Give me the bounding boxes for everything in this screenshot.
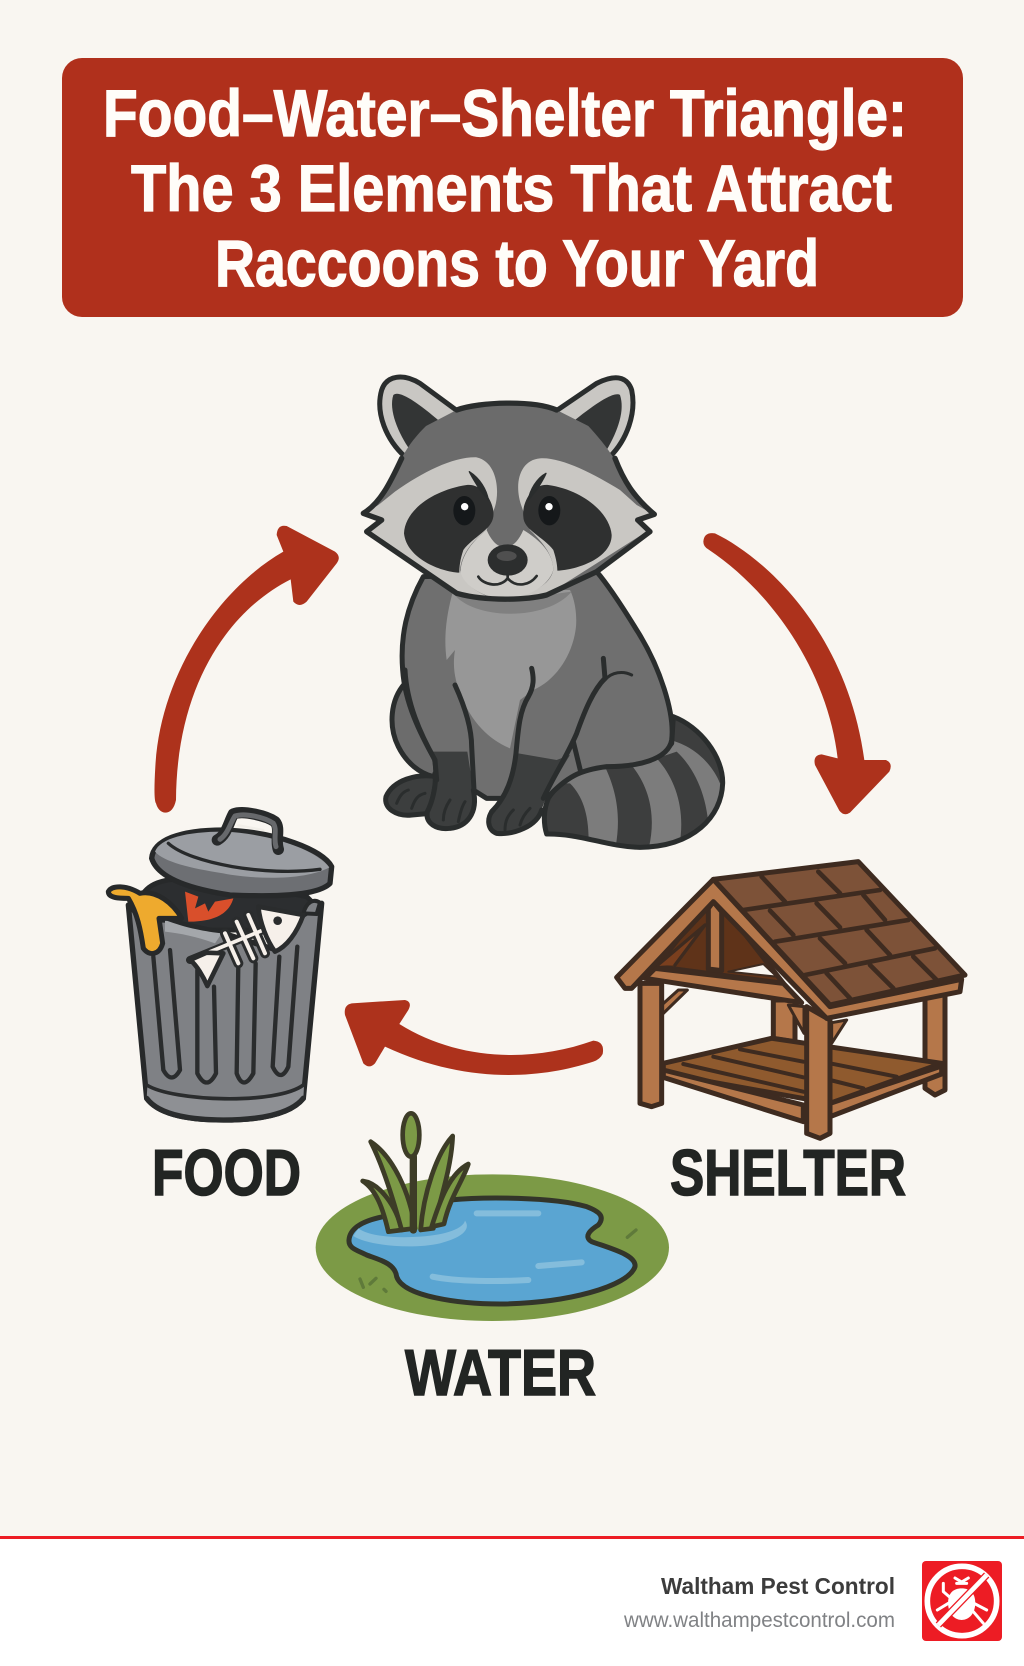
raccoon: back haunch	[392, 683, 440, 777]
trash: can body	[128, 903, 322, 1120]
shelter: rafters	[617, 879, 962, 1018]
footer: company name: Waltham Pest Control	[661, 1573, 895, 1599]
raccoon: head	[363, 403, 654, 599]
trash: contents	[143, 879, 317, 930]
shelter: rear posts	[773, 1000, 795, 1042]
shelter: braces	[662, 990, 687, 1015]
raccoon: eyes	[453, 496, 560, 525]
trash: fish skeleton	[190, 907, 303, 986]
shelter: cross beam	[645, 968, 802, 1003]
arrow: food to raccoon	[154, 526, 339, 813]
raccoon: right foreleg	[489, 753, 570, 834]
shelter: gable	[657, 893, 783, 983]
raccoon: leg lines	[397, 658, 632, 830]
icon: wooden shelter	[617, 862, 965, 1138]
raccoon: body	[402, 572, 672, 798]
footer	[0, 1536, 1024, 1666]
shelter: floor	[663, 1038, 942, 1103]
arrow: raccoon to shelter	[703, 533, 891, 814]
icon: raccoon	[363, 377, 730, 850]
shelter: roof shingles	[713, 862, 965, 1005]
raccoon: nose and mouth	[478, 544, 537, 584]
pond: grass tufts	[360, 1230, 636, 1291]
raccoon: left foreleg	[427, 752, 474, 829]
pond: cattail reeds	[363, 1113, 468, 1232]
trash: lid handle	[217, 813, 278, 849]
trash: lid	[152, 830, 332, 896]
trash: banana peel	[108, 887, 182, 954]
icon: pond with reeds	[316, 1113, 669, 1321]
trash: ribs	[147, 947, 303, 1120]
title banner	[62, 58, 963, 317]
pond: highlights	[353, 1213, 582, 1281]
pond: water	[349, 1198, 635, 1304]
trash: red scrap	[185, 892, 233, 922]
label: shelter: SHELTER	[670, 1136, 906, 1209]
shelter: front posts	[640, 983, 662, 1107]
title banner: The 3 Elements That Attract	[131, 151, 892, 225]
label: water: WATER	[405, 1336, 596, 1409]
raccoon: ears	[380, 377, 458, 457]
title banner: Food–Water–Shelter Triangle:	[103, 76, 907, 150]
footer: website: www.walthampestcontrol.com	[623, 1609, 895, 1632]
label: food: FOOD	[152, 1136, 301, 1209]
title banner: Raccoons to Your Yard	[215, 226, 819, 300]
icon: trash can with food	[108, 813, 332, 1120]
arrow: shelter to food	[345, 1000, 603, 1075]
raccoon: face markings	[365, 457, 500, 599]
footer: no-pest logo	[922, 1561, 1002, 1641]
pond: grass	[316, 1174, 669, 1321]
raccoon: back paw	[386, 776, 437, 815]
raccoon: chest	[445, 590, 576, 748]
